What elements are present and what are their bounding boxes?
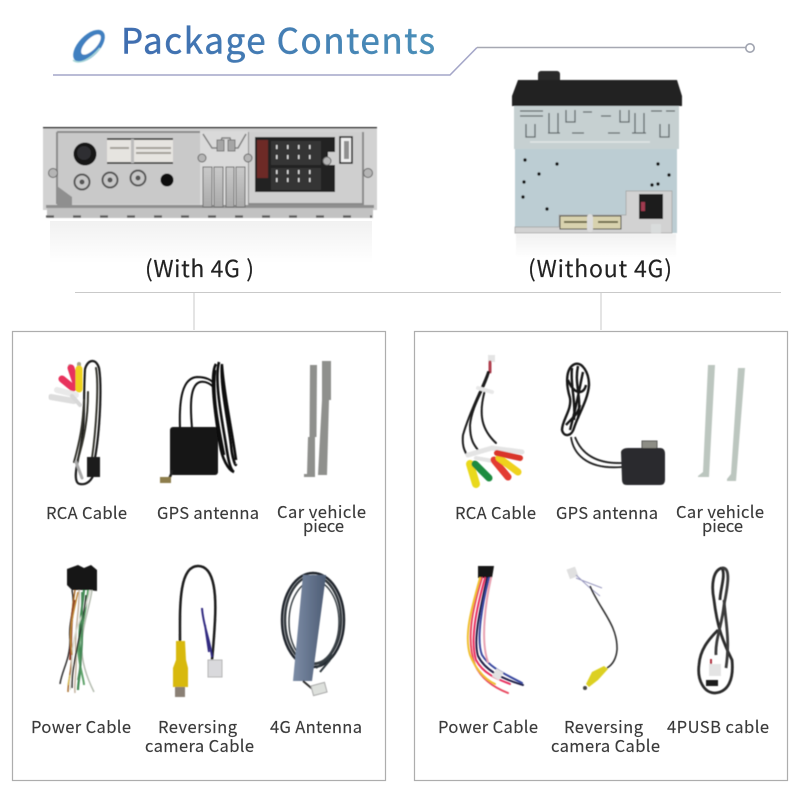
device: with 4G rear view (43, 127, 377, 263)
icon: GPS antenna (160, 362, 236, 483)
labels: with 4G accessories: GPS antenna (157, 500, 259, 524)
labels: without 4G accessories: piece (702, 513, 743, 537)
labels: with 4G accessories: piece (303, 513, 344, 537)
icon: reversing camera cable (173, 566, 222, 697)
knob (74, 142, 96, 166)
icon: car vehicle piece (698, 365, 745, 481)
labels: without 4G accessories: GPS antenna (556, 500, 658, 524)
rf connectors (74, 170, 146, 190)
labels: without 4G accessories: Car vehicle (676, 499, 764, 523)
labels: without 4G accessories: Reversing (564, 714, 644, 738)
label: without 4G: (Without 4G) (528, 250, 672, 284)
label: with 4G: (With 4G ) (145, 250, 254, 284)
device: without 4G rear view (512, 71, 682, 258)
panel: with 4G accessories (12, 332, 386, 780)
panel frame (414, 332, 788, 780)
labels: without 4G accessories (438, 499, 769, 757)
icon: reversing camera cable (567, 567, 617, 690)
icon: GPS antenna (562, 364, 665, 485)
logo icon (68, 24, 110, 68)
top metal (514, 106, 679, 149)
usb port (340, 137, 352, 163)
labels: without 4G accessories: Power Cable (438, 714, 538, 738)
header rule (53, 44, 754, 75)
black front (512, 80, 682, 106)
panel frame (12, 332, 386, 780)
labels: with 4G accessories: Car vehicle (277, 499, 366, 523)
labels: with 4G accessories: Reversing (158, 714, 238, 738)
labels: without 4G accessories: RCA Cable (455, 500, 536, 524)
slots (520, 110, 675, 137)
divider and connectors (75, 292, 781, 330)
icon: USB cable (699, 568, 732, 693)
labels: without 4G accessories: 4PUSB cable (667, 714, 769, 738)
labels: with 4G accessories (31, 499, 366, 757)
knob (538, 71, 560, 83)
icon: car vehicle piece (304, 361, 331, 477)
bottom housing (515, 191, 672, 233)
panel: without 4G accessories (414, 332, 788, 780)
icon: RCA cable (51, 361, 100, 484)
black port (160, 174, 174, 186)
title: Package Contents (121, 14, 435, 64)
labels: without 4G accessories: camera Cable (551, 733, 660, 757)
labels: with 4G accessories: RCA Cable (46, 500, 127, 524)
icon: 4G antenna (282, 573, 344, 696)
labels: with 4G accessories: camera Cable (145, 733, 254, 757)
labels: with 4G accessories: 4G Antenna (270, 714, 362, 738)
lower metal (515, 149, 677, 233)
black port (639, 194, 663, 219)
device reflection (50, 221, 372, 263)
bottom notch (651, 224, 661, 233)
screws (48, 154, 372, 178)
white connector (107, 139, 173, 163)
icon: power cable (60, 565, 97, 693)
device reflection (516, 234, 676, 258)
labels: with 4G accessories: Power Cable (31, 714, 131, 738)
dots (521, 158, 671, 211)
device body (43, 127, 377, 218)
icon: RCA cable (463, 355, 522, 484)
cream connector (560, 216, 621, 229)
iso connector (255, 137, 335, 192)
icon: power cable (468, 566, 523, 693)
